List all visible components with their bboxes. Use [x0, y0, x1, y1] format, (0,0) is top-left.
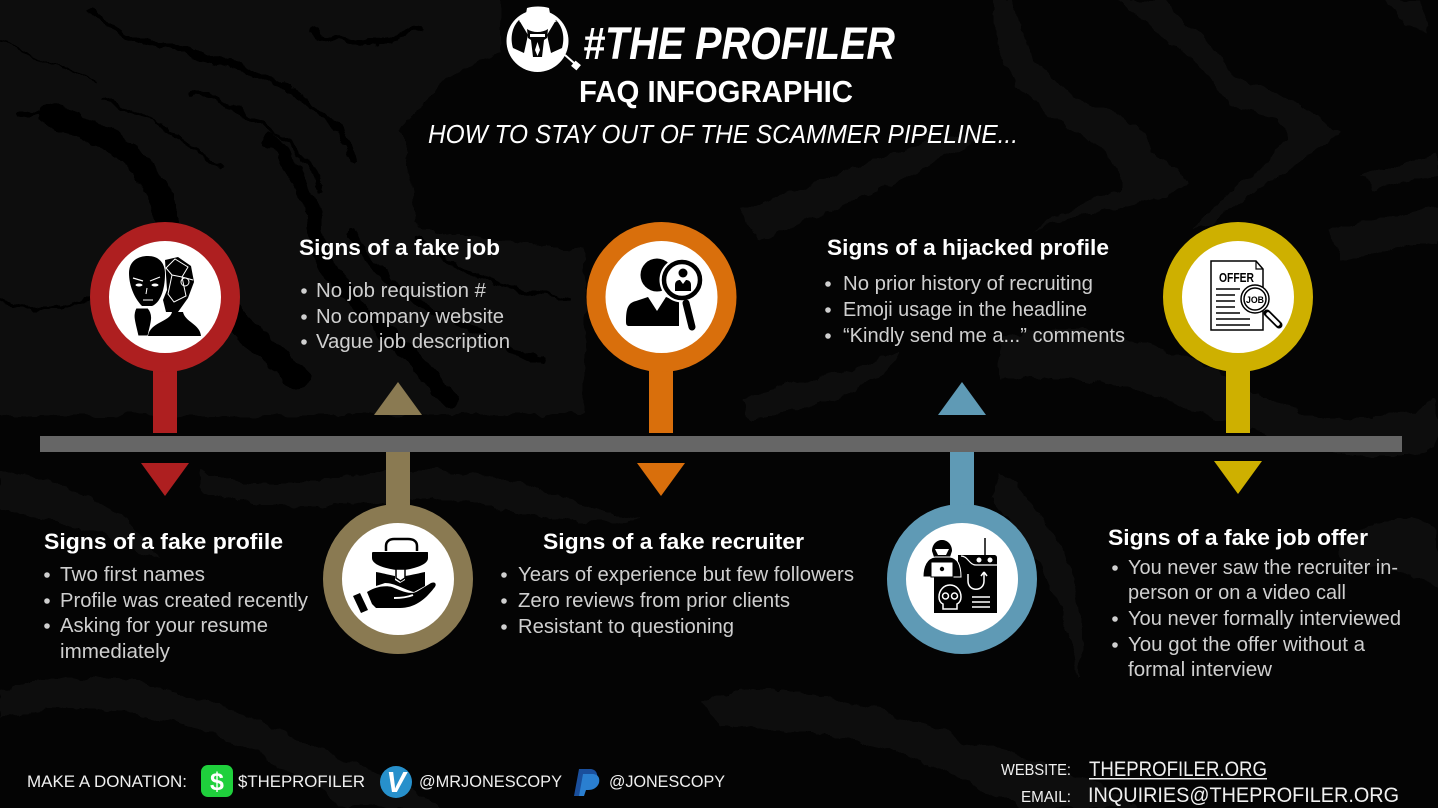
donation row: @JONESCOPY — [609, 772, 725, 791]
icon: Cash App: $ — [210, 768, 224, 796]
text block: fake job offer — [1108, 525, 1401, 681]
text block: fake recruiter: Resistant to questioning — [518, 616, 734, 638]
donation row — [27, 765, 725, 799]
text block: fake job: No company website — [316, 306, 504, 328]
arrow: fake profile — [141, 463, 189, 496]
icon: Cash App — [201, 765, 233, 797]
contact block: THEPROFILER.ORG — [1089, 758, 1267, 781]
icon: person under magnifier — [626, 258, 704, 327]
contact block: INQUIRIES@THEPROFILER.ORG — [1088, 784, 1399, 807]
icon: PayPal — [574, 769, 599, 796]
text block: fake job offer: You got the offer without a — [1128, 634, 1366, 656]
text block: fake job: Signs of a fake job — [299, 235, 500, 260]
arrow: fake job offer — [1214, 461, 1262, 494]
title: #THE PROFILER — [583, 18, 895, 69]
text block: hijacked profile: Emoji usage in the headline — [843, 299, 1087, 321]
icon: Venmo — [380, 766, 412, 799]
icon: offer document — [1211, 261, 1279, 330]
text block: fake profile: Signs of a fake profile — [44, 529, 283, 554]
text block: hijacked profile — [825, 235, 1125, 347]
marker: hijacked profile — [896, 452, 1028, 644]
arrow: hijacked profile — [938, 382, 986, 415]
contact block — [1001, 758, 1399, 807]
icon: Venmo: V — [386, 767, 408, 799]
marker: fake recruiter — [596, 232, 727, 433]
contact block: WEBSITE: — [1001, 762, 1071, 779]
text block: fake job: No job requistion # — [316, 280, 487, 302]
text block: fake recruiter: Zero reviews from prior clients — [518, 590, 790, 612]
icon: offer document: OFFER — [1219, 271, 1254, 285]
marker: fake profile — [100, 232, 230, 433]
subtitle: HOW TO STAY OUT OF THE SCAMMER PIPELINE... — [428, 119, 1018, 149]
text block: fake profile: Two first names — [60, 564, 205, 586]
logo: detective magnifier — [506, 6, 581, 72]
contact block: EMAIL: — [1021, 789, 1071, 806]
marker: fake job offer — [1172, 232, 1304, 433]
timeline bar — [40, 436, 1402, 452]
text block: hijacked profile: “Kindly send me a...” comments — [843, 325, 1125, 347]
text block: fake job offer: You never formally interviewed — [1128, 608, 1401, 630]
donation row: $THEPROFILER — [238, 772, 365, 791]
icon: offer document: JOB — [1246, 295, 1264, 305]
icon: mask and robot — [129, 256, 201, 336]
arrow: fake job — [374, 382, 422, 415]
icon: briefcase on hand — [353, 539, 436, 613]
text block: fake recruiter: Signs of a fake recruiter — [543, 529, 804, 554]
text block: fake profile: Asking for your resume — [60, 615, 268, 637]
arrow: fake recruiter — [637, 463, 685, 496]
text block: fake profile: immediately — [60, 641, 170, 663]
icon: hacker and skull — [923, 538, 997, 613]
text block: hijacked profile: No prior history of recruiting — [843, 273, 1093, 295]
text block: fake job — [299, 235, 510, 353]
donation row: @MRJONESCOPY — [419, 772, 562, 791]
text block: fake profile: Profile was created recently — [60, 590, 308, 612]
text block: fake job offer: person or on a video call — [1128, 582, 1346, 604]
text block: fake profile — [44, 529, 308, 663]
donation row: MAKE A DONATION: — [27, 772, 187, 791]
text block: fake job: Vague job description — [316, 331, 510, 353]
text block: fake job offer: You never saw the recruiter in- — [1128, 557, 1398, 579]
marker: fake job — [332, 452, 464, 644]
text block: fake recruiter: Years of experience but few followers — [518, 564, 854, 586]
heading: FAQ infographic: FAQ INFOGRAPHIC — [579, 74, 853, 109]
text block: fake recruiter — [501, 529, 854, 638]
text block: fake job offer: Signs of a fake job offer — [1108, 525, 1368, 550]
text block: fake job offer: formal interview — [1128, 659, 1273, 681]
text block: hijacked profile: Signs of a hijacked profile — [827, 235, 1109, 260]
